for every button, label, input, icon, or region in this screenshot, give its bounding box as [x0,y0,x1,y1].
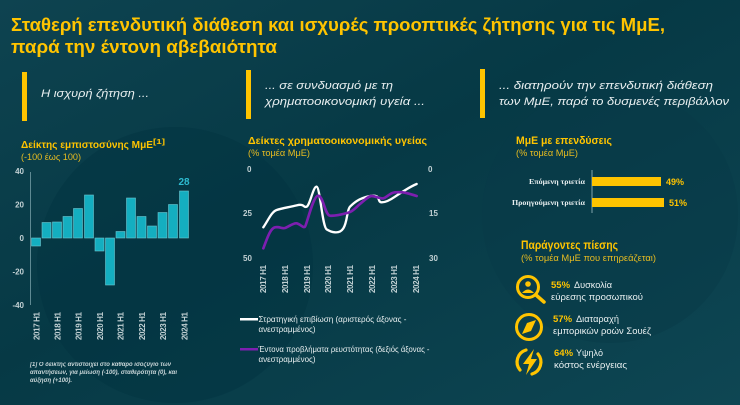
line chart: financial health indicators: 2022 H1 [368,264,377,293]
line chart: financial health indicators: 30 [429,254,438,263]
bar chart: SME confidence index: 0 [20,234,25,243]
bar chart: SME confidence index: 40 [15,167,25,176]
heading: SME confidence index: (-100 έως 100) [21,152,81,162]
legend: strategic survival: ανεστραμμένος) [258,325,316,334]
heading: pressure factors: Παράγοντες πίεσης [521,238,618,252]
bar chart: SME confidence index: -40 [12,301,25,310]
heading: SMEs with investments: ΜμΕ με επενδύσεις [516,135,612,147]
line chart: financial health indicators: 2024 H1 [412,264,421,293]
legend: strategic survival [240,315,407,334]
icon: energy bolt [517,349,541,375]
title: παρά την έντονη αβεβαιότητα [11,37,277,57]
factor: Suez trade disruption: Διαταραχή [576,314,619,325]
heading: SME confidence index [21,139,165,162]
line chart: financial health indicators: 2021 H1 [346,264,355,293]
factor: Suez trade disruption: 57% [553,314,573,325]
bar chart: SME confidence index: 2021 H1 [116,311,126,340]
icon: magnifier with person [518,276,544,302]
bar chart: SME confidence index: 2018 H1 [54,311,62,340]
bar chart: SME confidence index: -20 [12,268,25,276]
line chart: financial health indicators: 2019 H1 [303,264,312,293]
line chart: financial health indicators: 25 [243,209,252,218]
bar chart: SME confidence index: 2022 H1 [138,311,147,340]
heading: SMEs with investments [516,135,612,158]
bar chart: SMEs with investments: Επόμενη τριετία [529,178,585,186]
factor: energy cost: Υψηλό [576,348,603,359]
panel: strong demand heading: Η ισχυρή ζήτηση ... [41,88,149,100]
heading: SME confidence index: [1] [153,139,165,146]
heading: financial health indicators [248,135,428,158]
legend: strategic survival: Στρατηγική επιβίωση (αριστερός άξονας - [258,315,407,324]
line chart: financial health indicators: 0 [247,165,252,174]
bar chart: SME confidence index: 2023 H1 [159,311,168,340]
bar chart: SME confidence index: 2020 H1 [96,311,105,340]
icon: compass [516,314,542,340]
heading: SME confidence index: Δείκτης εμπιστοσύνης ΜμΕ [21,139,153,151]
bar chart: SME confidence index: 2019 H1 [74,311,84,340]
bar chart: SME confidence index: 2017 H1 [32,311,42,340]
legend: liquidity problems: Έντονα προβλήματα ρευστότητας (δεξιός άξονας - [258,345,430,354]
bar chart: SMEs with investments: 49% [666,177,684,187]
factor: staff shortage [551,280,643,303]
footnote: απαντήσεων, για μείωση (-100), σταθερότητα (0), και [30,370,177,376]
heading: pressure factors: (% τομέα ΜμΕ που επηρεάζεται) [521,253,656,263]
factor: staff shortage: 55% [551,280,571,291]
heading: SMEs with investments: (% τομέα ΜμΕ) [516,148,578,158]
bar chart: SME confidence index [12,167,190,340]
line chart: financial health indicators: 2020 H1 [324,264,333,293]
footnote: αύξηση (+100). [30,378,72,384]
legend: liquidity problems: ανεστραμμένος) [258,355,316,364]
footnote [29,362,177,384]
panel: financial health heading: ... σε συνδυασμό με τη [265,80,393,92]
title: Σταθερή επενδυτική διάθεση και ισχυρές προοπτικές ζήτησης για τις ΜμΕ, [11,15,665,36]
title [11,15,665,57]
factor: Suez trade disruption: εμπορικών ροών Σουέζ [553,326,652,337]
line chart: financial health indicators: 2023 H1 [390,264,399,293]
bar chart: SMEs with investments: Προηγούμενη τριετία [512,199,585,207]
line chart: financial health indicators: 2018 H1 [281,264,290,293]
panel: investment appetite heading [480,69,730,118]
factor: staff shortage: εύρεσης προσωπικού [551,292,643,303]
factor: Suez trade disruption [553,314,652,337]
bar chart: SME confidence index: 28 [178,177,190,188]
line chart: financial health indicators: 50 [243,254,252,263]
panel: investment appetite heading: ... διατηρούν την επενδυτική διάθεση [499,80,713,92]
bar chart: SME confidence index: 2024 H1 [180,311,190,340]
line: strategic survival [263,184,417,232]
line: liquidity problems [263,192,417,248]
footnote: [1] Ο δείκτης αντιστοιχεί στο καθαρό ισοζύγιο των [29,362,172,368]
factor: staff shortage: Δυσκολία [574,280,612,291]
panel: financial health heading [246,70,425,119]
heading: pressure factors [521,238,656,263]
line chart: financial health indicators: 2017 H1 [259,264,268,293]
bar chart: SMEs with investments [512,170,687,213]
line chart: financial health indicators: 15 [429,209,438,218]
panel: financial health heading: χρηματοοικονομική υγεία ... [264,96,425,108]
heading: financial health indicators: (% τομέα ΜμΕ) [248,148,310,158]
bar chart: SMEs with investments: 51% [669,198,687,208]
heading: financial health indicators: Δείκτες χρηματοοικονομικής υγείας [248,135,428,147]
panel: strong demand heading [22,72,149,121]
bar chart: SME confidence index: 20 [15,200,25,210]
factor: energy cost: κόστος ενέργειας [554,360,627,371]
panel: investment appetite heading: των ΜμΕ, παρά το δυσμενές περιβάλλον [499,96,730,108]
line chart: financial health indicators: 0 [428,165,433,174]
factor: energy cost [554,348,627,371]
factor: energy cost: 64% [554,348,574,359]
legend: liquidity problems [240,345,430,364]
line chart: financial health indicators [243,165,438,293]
